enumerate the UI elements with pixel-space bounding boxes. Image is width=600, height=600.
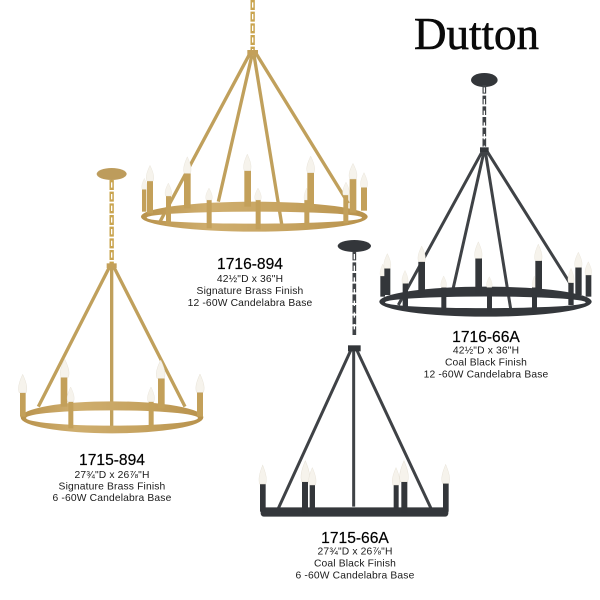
ring <box>261 507 448 517</box>
label: 1716-894 <box>188 256 313 309</box>
candles <box>142 154 367 229</box>
hub <box>348 345 361 351</box>
label: 1716-66A: 12 -60W Candelabra Base <box>424 370 549 380</box>
chandelier: 1715-66A coal black six-light <box>259 240 450 517</box>
label: 1715-66A: 27¾"D x 26⅞"H <box>317 546 393 558</box>
support arms <box>160 53 348 230</box>
label: 1715-66A: 6 -60W Candelabra Base <box>296 570 415 582</box>
label: 1715-66A: 1715-66A <box>321 530 389 547</box>
label: 1716-894: Signature Brass Finish <box>197 286 304 297</box>
chandelier: 1716-894 brass twelve-light <box>141 0 368 232</box>
candles <box>380 242 592 312</box>
hub <box>247 50 258 55</box>
ring <box>141 202 368 232</box>
chandelier: 1715-894 brass six-light <box>19 168 204 433</box>
chain <box>246 0 259 50</box>
label: 1716-894: 42½"D x 36"H <box>217 274 283 285</box>
chain <box>479 85 490 147</box>
label: 1716-66A <box>424 329 549 380</box>
label: 1716-66A: 1716-66A <box>452 329 520 346</box>
title: Dutton <box>414 9 539 59</box>
canopy <box>338 240 371 252</box>
chain <box>349 252 360 337</box>
label: 1716-66A: Coal Black Finish <box>445 358 527 368</box>
chain <box>105 180 118 264</box>
support arms <box>398 151 570 315</box>
support arms <box>278 348 431 508</box>
label: 1716-894: 1716-894 <box>217 256 283 273</box>
label: 1715-894 <box>53 452 172 504</box>
label: 1715-66A: Coal Black Finish <box>314 558 396 570</box>
label: 1715-66A <box>296 530 415 582</box>
ring <box>21 401 203 433</box>
candles <box>19 359 204 428</box>
label: 1715-894: Signature Brass Finish <box>59 482 166 492</box>
canopy <box>97 168 127 180</box>
label: 1715-894: 1715-894 <box>79 452 145 469</box>
label: 1716-894: 12 -60W Candelabra Base <box>188 298 313 309</box>
chandelier: 1716-66A coal black twelve-light <box>379 73 592 317</box>
hub <box>480 147 489 152</box>
hub <box>107 263 117 268</box>
ring <box>379 287 592 317</box>
label: 1715-894: 27¾"D x 26⅞"H <box>74 470 150 481</box>
label: 1716-66A: 42½"D x 36"H <box>453 346 519 356</box>
support arms <box>38 266 185 432</box>
label: 1715-894: 6 -60W Candelabra Base <box>53 493 172 504</box>
canopy <box>471 73 498 87</box>
candles <box>259 461 450 513</box>
